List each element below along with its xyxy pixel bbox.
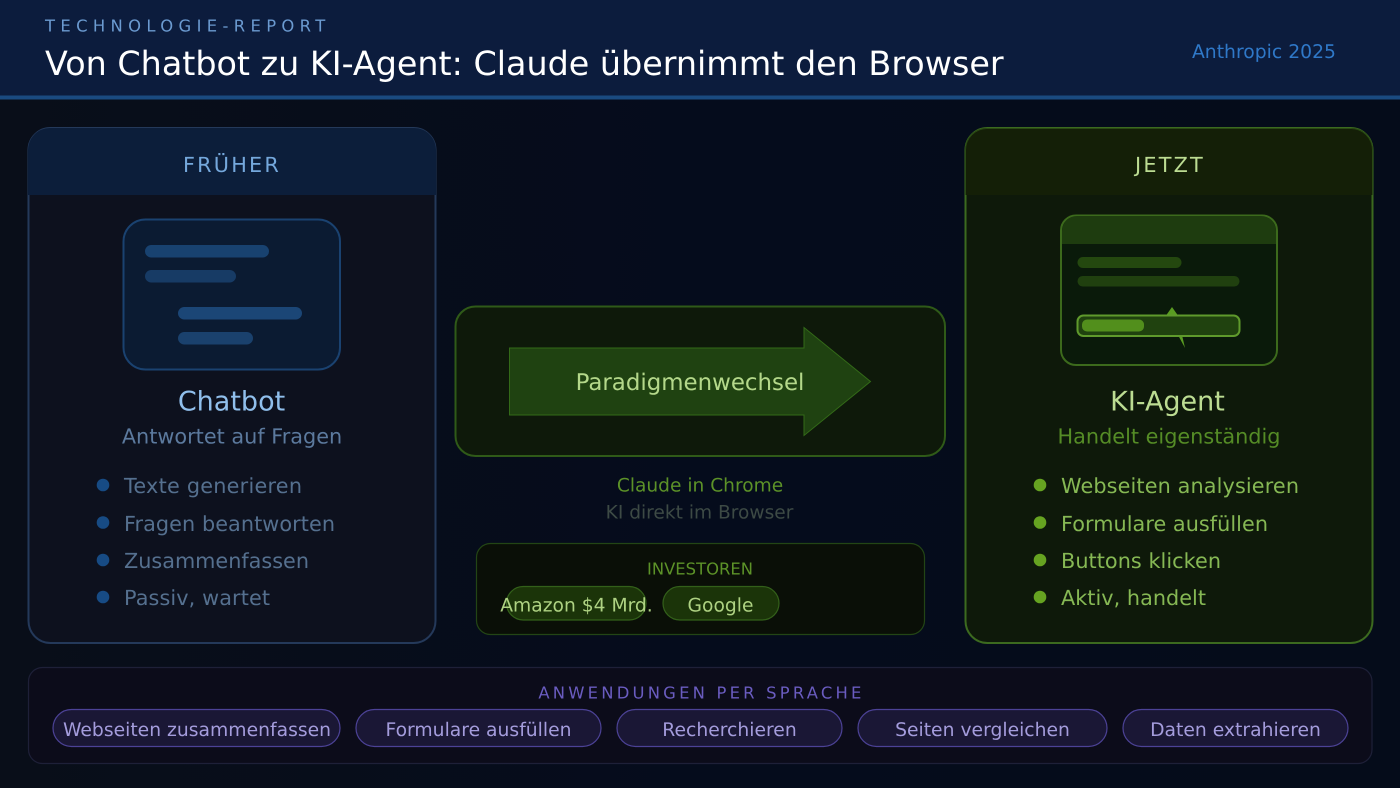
chip: google xyxy=(663,586,779,620)
card title: KI-Agent xyxy=(1110,386,1225,418)
panel: früher xyxy=(28,128,436,643)
caption: browser note: KI direkt im Browser xyxy=(606,502,794,524)
feature list xyxy=(97,474,335,610)
card subtitle: Antwortet auf Fragen xyxy=(122,424,342,448)
card title: Chatbot xyxy=(178,386,285,418)
card subtitle: Handelt eigenständig xyxy=(1058,424,1280,448)
arrow label: Paradigmenwechsel xyxy=(576,370,804,396)
chip: webseiten xyxy=(53,710,340,746)
arrow xyxy=(510,328,870,436)
kicker: TECHNOLOGIE-REPORT xyxy=(44,16,331,36)
chip: daten xyxy=(1123,710,1348,746)
feature list: Buttons klicken xyxy=(1061,549,1221,573)
feature list xyxy=(1034,474,1299,610)
panel heading: FRÜHER xyxy=(183,153,281,177)
chip: vergleichen xyxy=(858,710,1107,746)
feature list: Passiv, wartet xyxy=(124,586,270,610)
feature list: Webseiten analysieren xyxy=(1061,474,1299,498)
investors heading: INVESTOREN xyxy=(647,560,753,578)
source label: Anthropic 2025 xyxy=(1192,42,1336,63)
panel: paradigm shift xyxy=(456,306,945,456)
panel heading: JETZT xyxy=(1133,153,1205,177)
feature list: Texte generieren xyxy=(123,474,302,498)
feature list: Fragen beantworten xyxy=(124,512,335,536)
chip: amazon: Amazon $4 Mrd. xyxy=(500,596,653,616)
title: Von Chatbot zu KI-Agent: Claude übernimmt den Browser xyxy=(45,44,1004,83)
panel: jetzt xyxy=(965,128,1373,643)
icon: chat window xyxy=(124,220,340,370)
chip: google: Google xyxy=(688,596,753,616)
feature list: Formulare ausfüllen xyxy=(1061,512,1268,536)
chip: daten: Daten extrahieren xyxy=(1150,720,1321,741)
chip: recherchieren: Recherchieren xyxy=(662,720,797,741)
caption: claude in chrome: Claude in Chrome xyxy=(617,476,783,496)
panel: investors xyxy=(476,544,924,634)
chip: recherchieren xyxy=(617,710,842,746)
feature list: Aktiv, handelt xyxy=(1061,586,1206,610)
panel: applications xyxy=(28,668,1372,764)
header xyxy=(0,0,1400,100)
chip: amazon xyxy=(500,586,653,620)
chip: formulare: Formulare ausfüllen xyxy=(385,720,572,741)
chip: webseiten: Webseiten zusammenfassen xyxy=(63,720,331,741)
chip: formulare xyxy=(356,710,601,746)
chip: vergleichen: Seiten vergleichen xyxy=(895,720,1070,741)
feature list: Zusammenfassen xyxy=(124,549,309,573)
applications heading: ANWENDUNGEN PER SPRACHE xyxy=(538,684,865,702)
icon: browser with form xyxy=(1061,216,1277,365)
